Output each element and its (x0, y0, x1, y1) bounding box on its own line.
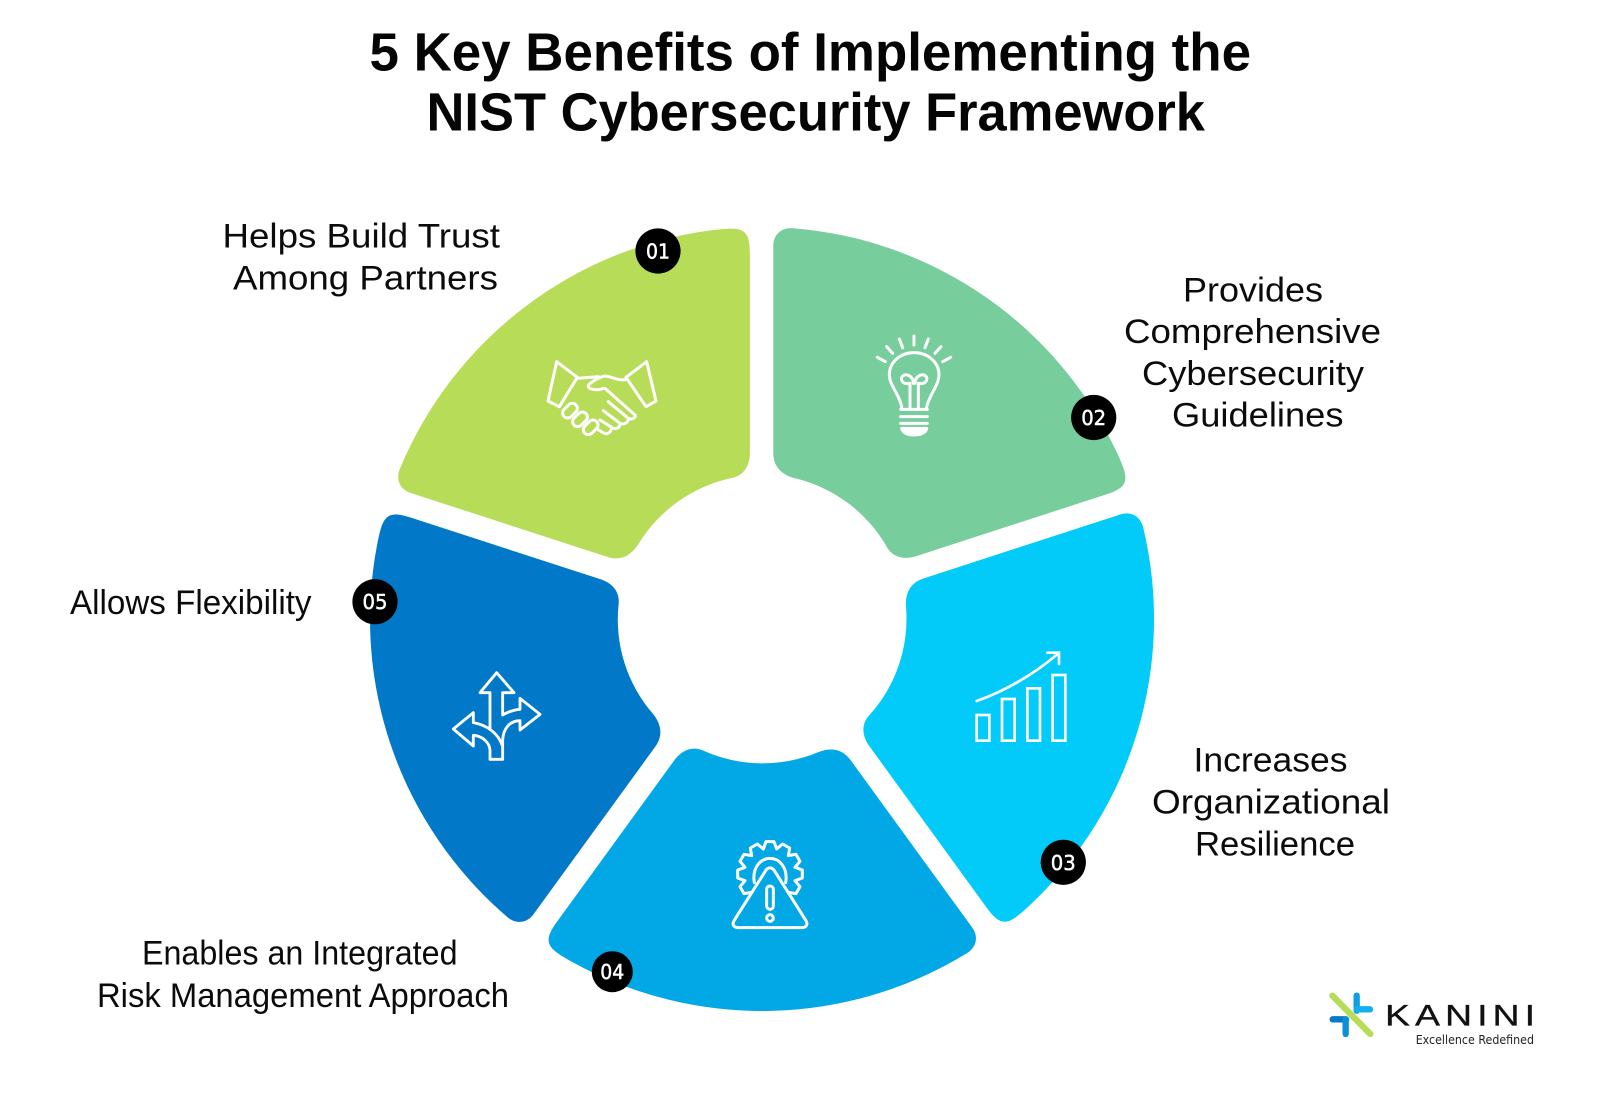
badge 05: 05 (362, 590, 388, 614)
icon: light bulb (877, 336, 951, 435)
label 03: Increases (1194, 742, 1348, 780)
label 03: Resilience (1195, 826, 1355, 864)
badge 01: 01 (646, 240, 670, 264)
icon: rising bar chart (977, 653, 1065, 741)
panel: 01 trust (222, 153, 816, 589)
label 02: Provides (1183, 272, 1323, 310)
label 03 (1152, 742, 1390, 864)
icon: gear with warning triangle (733, 842, 807, 928)
segment 03 (824, 509, 1246, 946)
panel: 05 flexibility (70, 455, 717, 929)
badge 01 (635, 228, 681, 274)
panel: 03 resilience (824, 509, 1390, 946)
label 03: Organizational (1152, 784, 1390, 822)
title: 5 Key Benefits of Implementing the (370, 22, 1251, 82)
badge 03 (1041, 840, 1086, 885)
label 04 (97, 935, 509, 1015)
title: NIST Cybersecurity Framework (426, 82, 1206, 142)
badge 05 (352, 579, 398, 624)
label 02: Comprehensive (1124, 313, 1381, 351)
segment 04 (504, 675, 983, 1113)
segment 01 (394, 153, 816, 589)
icon: handshake (548, 362, 656, 437)
label 02 (1124, 272, 1381, 435)
badge 03: 03 (1051, 851, 1076, 875)
label 01: Helps Build Trust (222, 218, 500, 256)
logo wordmark: KANINI (1385, 1000, 1540, 1033)
logo tagline: Excellence Redefined (1416, 1032, 1534, 1047)
label 01: Among Partners (233, 260, 498, 298)
label 02: Cybersecurity (1142, 355, 1365, 393)
label 04: Risk Management Approach (97, 977, 509, 1015)
badge 02 (1071, 395, 1116, 440)
badge 02: 02 (1081, 406, 1106, 430)
segment 02 (773, 228, 1125, 558)
panel: 02 guidelines (773, 228, 1381, 558)
title (370, 22, 1251, 142)
badge 04 (592, 951, 633, 992)
label 05: Allows Flexibility (70, 584, 312, 622)
logo: Kanini (1332, 996, 1540, 1047)
badge 04: 04 (600, 960, 624, 984)
logo mark (1332, 996, 1370, 1034)
label 04: Enables an Integrated (142, 935, 458, 973)
label 01 (222, 218, 500, 298)
panel: 04 risk management (97, 675, 983, 1113)
icon: branching arrows (453, 673, 540, 759)
label 02: Guidelines (1172, 397, 1344, 435)
segment 05 (238, 455, 717, 929)
